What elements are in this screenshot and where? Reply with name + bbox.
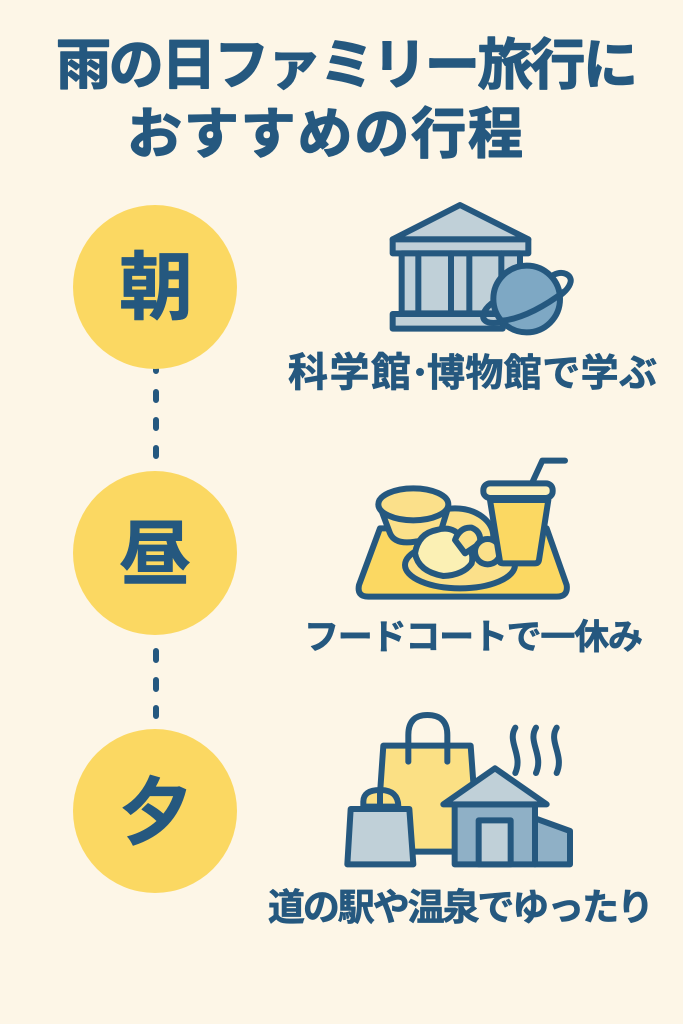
label: morning activity	[288, 351, 657, 395]
title	[56, 34, 638, 165]
badge: noon: 昼	[119, 515, 191, 595]
icon: food court tray	[359, 461, 567, 597]
label: morning activity: 博物館で学ぶ	[427, 353, 657, 395]
badge: evening: 夕	[119, 771, 193, 854]
icon: museum and planet	[393, 205, 571, 332]
timeline connector: noon to evening	[153, 651, 159, 716]
title: おすすめの行程	[127, 103, 523, 165]
label: evening activity: 道の駅や温泉でゆったり	[268, 887, 654, 928]
timeline connector: morning to noon	[153, 369, 159, 456]
badge: morning: 朝	[119, 246, 193, 329]
badge: morning	[73, 205, 237, 369]
badge: noon	[73, 471, 237, 635]
label: morning activity: 科学館	[288, 351, 411, 395]
icon: shopping bags and hot spring inn	[347, 715, 570, 864]
badge: evening	[73, 729, 237, 893]
label: noon activity: フードコートで一休み	[304, 618, 643, 657]
title: 雨の日ファミリー旅行に	[56, 34, 638, 96]
